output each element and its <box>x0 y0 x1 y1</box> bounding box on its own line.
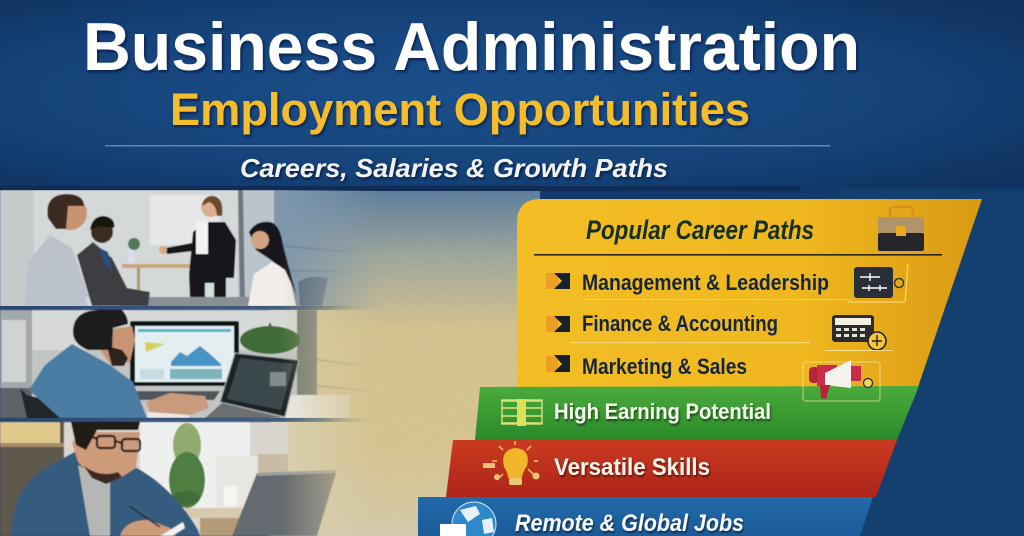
career item: finance and accounting: Finance & Accounting <box>582 311 778 336</box>
icon: calculator <box>825 315 893 351</box>
icon: management board <box>848 264 908 302</box>
man in grey shirt <box>25 235 92 306</box>
career item: finance and accounting <box>546 311 810 343</box>
panel: remote and global jobs <box>418 497 873 536</box>
photo: man writing <box>0 422 380 536</box>
label: high earning potential: High Earning Potential <box>554 399 771 424</box>
table <box>120 297 300 307</box>
icon: globe <box>440 502 496 536</box>
icon: megaphone <box>803 360 880 401</box>
presenter <box>189 222 236 298</box>
man at desk <box>29 344 147 418</box>
icon: banknotes <box>501 399 542 426</box>
man <box>11 450 200 536</box>
plant <box>169 423 205 508</box>
panel: popular career paths <box>517 199 982 390</box>
plant <box>240 322 300 354</box>
laptop <box>232 470 337 536</box>
photo column <box>0 190 380 536</box>
panel: versatile skills <box>446 440 897 497</box>
icon: briefcase <box>878 207 924 251</box>
subtitle: employment opportunities: Employment Opportunities <box>170 84 750 135</box>
monitor <box>130 321 239 386</box>
photo: analyst at monitor <box>0 310 380 418</box>
man in dark suit <box>77 242 150 306</box>
tagline: Careers, Salaries & Growth Paths <box>240 153 668 183</box>
icon: light bulb <box>483 441 540 485</box>
panel: high earning potential <box>475 386 919 440</box>
title: Business Administration <box>83 9 860 85</box>
heading: popular career paths: Popular Career Paths <box>586 215 814 245</box>
chair <box>20 388 60 418</box>
laptop <box>220 353 299 417</box>
label: versatile skills: Versatile Skills <box>554 454 710 481</box>
career item: marketing and sales: Marketing & Sales <box>582 354 747 379</box>
career item: management and leadership: Management & Leadership <box>582 270 829 295</box>
keyboard <box>130 391 220 400</box>
photo: team meeting <box>0 190 380 307</box>
woman seated <box>248 262 296 306</box>
